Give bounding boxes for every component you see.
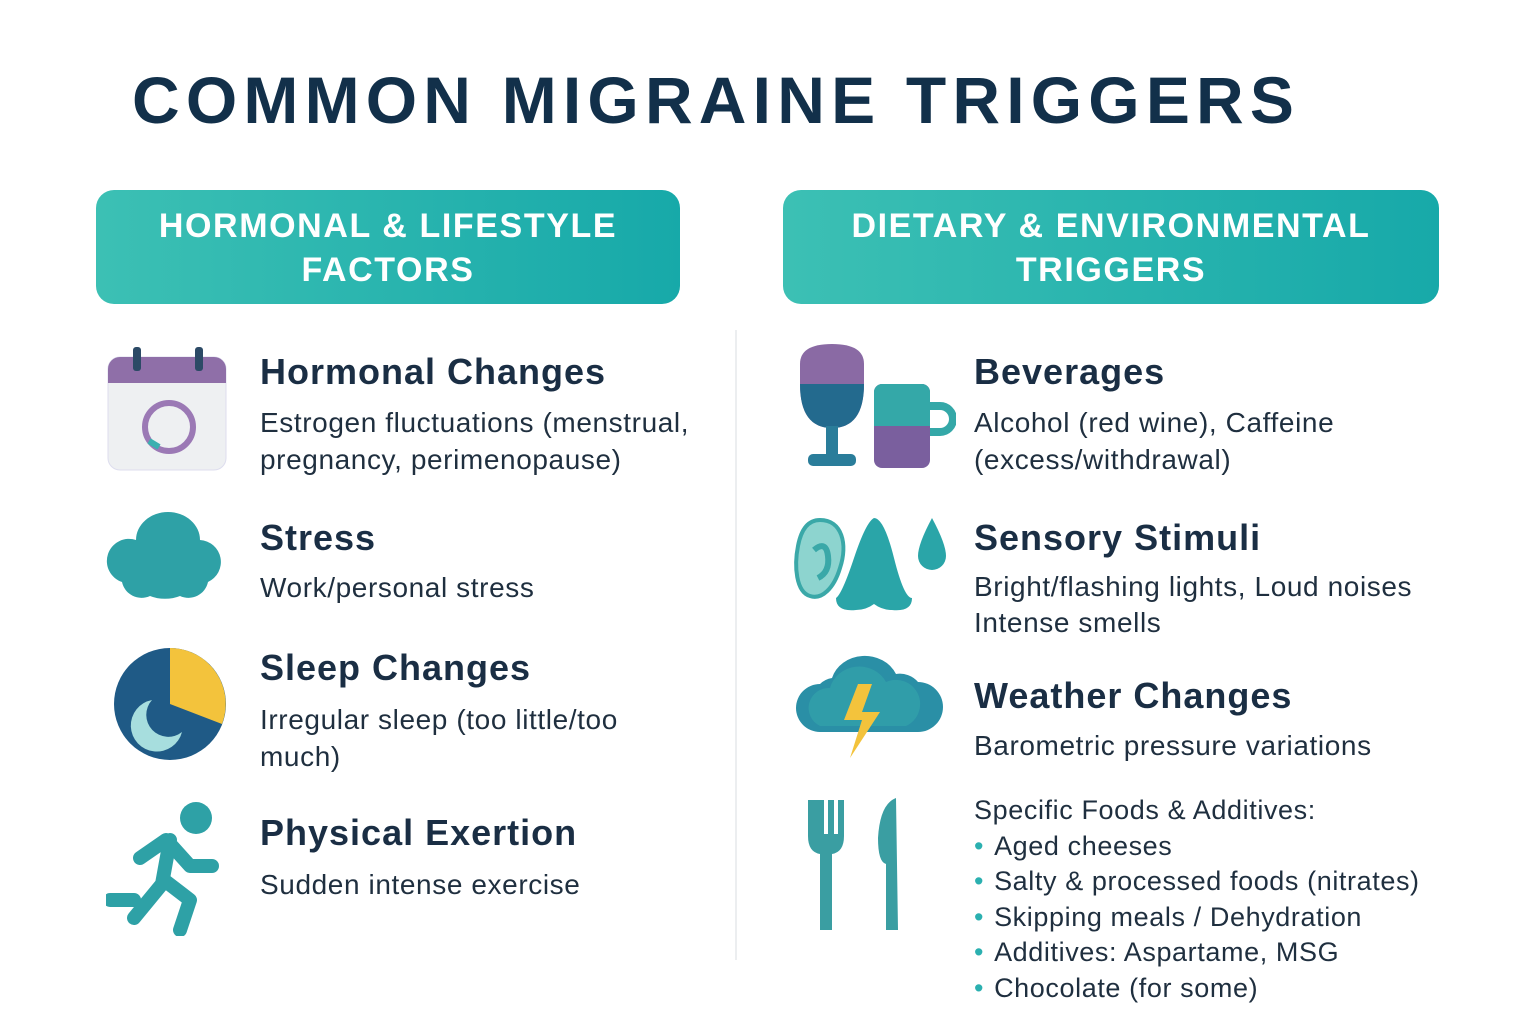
text: hormonal: pregnancy, perimenopause) [260, 444, 622, 475]
heading: sensory stimuli: Sensory Stimuli [974, 517, 1261, 558]
text: sensory: Intense smells [974, 607, 1161, 638]
header: hormonal & lifestyle [96, 190, 680, 304]
icon: runner [106, 802, 219, 936]
list: specific foods: • Salty & processed foods (nitrates) [974, 866, 1420, 896]
header: dietary & environmental: DIETARY & ENVIRONMENTAL [851, 207, 1371, 245]
text: stress: Work/personal stress [260, 572, 534, 603]
icon: moon [114, 648, 226, 760]
heading: beverages: Beverages [974, 351, 1165, 392]
text: exertion: Sudden intense exercise [260, 869, 580, 900]
header: dietary & environmental: TRIGGERS [1016, 251, 1206, 289]
text: weather: Barometric pressure variations [974, 730, 1372, 761]
header: hormonal & lifestyle: FACTORS [301, 251, 475, 289]
text: sleep [260, 704, 618, 772]
icon: storm cloud [796, 656, 943, 758]
list: specific foods: Specific Foods & Additives: [974, 795, 1316, 825]
text: hormonal: Estrogen fluctuations (menstrual, [260, 407, 689, 438]
icon: calendar [108, 347, 226, 470]
title: COMMON MIGRAINE TRIGGERS [132, 63, 1300, 137]
header: hormonal & lifestyle: HORMONAL & LIFESTYLE [159, 207, 617, 245]
text: sensory: Bright/flashing lights, Loud noises [974, 571, 1412, 602]
text: sleep: Irregular sleep (too little/too [260, 704, 618, 735]
header: dietary & environmental [783, 190, 1439, 304]
heading: sleep changes: Sleep Changes [260, 647, 531, 688]
heading: weather changes: Weather Changes [974, 675, 1292, 716]
list: specific foods: • Additives: Aspartame, MSG [974, 937, 1339, 967]
icon: beverages [800, 344, 956, 468]
list: specific foods: • Skipping meals / Dehydration [974, 902, 1362, 932]
heading: stress: Stress [260, 517, 376, 558]
list: specific foods: • Chocolate (for some) [974, 972, 1258, 1002]
icon: ear nose drop [794, 518, 946, 610]
heading: hormonal changes: Hormonal Changes [260, 351, 606, 392]
text: sleep: much) [260, 741, 341, 772]
text: hormonal [260, 407, 689, 475]
text: beverages: Alcohol (red wine), Caffeine [974, 407, 1334, 438]
list: specific foods: • Aged cheeses [974, 830, 1172, 860]
text: beverages [974, 407, 1334, 475]
text: beverages: (excess/withdrawal) [974, 444, 1231, 475]
text: sensory [974, 571, 1412, 638]
heading: physical exertion: Physical Exertion [260, 812, 577, 853]
icon: cloud [106, 512, 221, 599]
list: specific foods [974, 795, 1420, 1002]
icon: fork and knife [808, 798, 898, 930]
